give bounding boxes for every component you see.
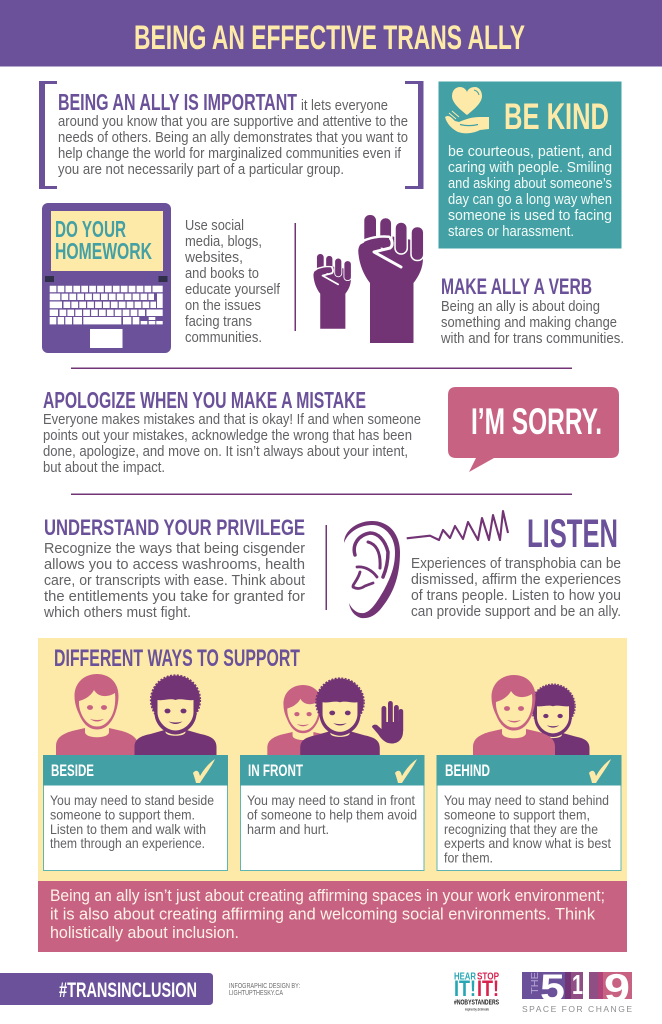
body text: Everyone makes mistakes and that is okay! If and when someone [43,412,421,428]
card heading: IN FRONT [248,762,303,780]
logo: hear it stop it [454,972,499,1012]
card heading: BEHIND [445,762,490,780]
card heading: BESIDE [51,762,94,780]
body text [58,98,408,178]
figures: behind [473,675,589,756]
figures: beside [56,674,216,755]
body text: Recognize the ways that being cisgender [44,541,305,557]
panel: do your homework laptop [42,203,171,353]
body text: care, or transcripts with ease. Think about [44,573,305,589]
body text: it lets everyone [301,98,388,114]
text: do your homework: facing trans [185,314,252,330]
panel: make ally a verb: MAKE ALLY A VERB [441,274,592,299]
laptop hinges [45,276,168,282]
text: do your homework: Use social [185,218,244,234]
logo: hear it stop it: inspired by @ctvinside [465,1006,489,1012]
card: behind [436,755,622,870]
body text: stares or harassment. [448,224,574,240]
body text: needs of others. Being an ally demonstrates that you want to [58,130,408,146]
logo: hear it stop it: IT! [477,976,499,1001]
laptop screen [51,211,163,271]
hashtag banner: #TRANSINCLUSION [59,979,197,1002]
card text [247,792,417,837]
body text: but about the impact. [43,460,165,476]
card text: Listen to them and walk with [50,821,206,837]
card: in front [240,755,424,870]
body text: which others must fight. [43,605,191,621]
icon: sound wave [407,511,508,540]
card: beside [43,755,228,870]
logo: the 519: THE [530,972,541,994]
logo: the 519: 5 [540,967,565,1010]
callout: think holistically [38,881,627,952]
logo: hear it stop it: IT! [454,976,476,1001]
body text: of trans people. Listen to how you [411,588,621,604]
body text: dismissed, affirm the experiences [411,572,621,588]
hashtag banner [0,973,213,1005]
body text: can provide support and be an ally. [411,604,621,620]
figures: in front [267,678,380,756]
body text: the entitlements you take for granted for [44,589,305,605]
body text [43,541,305,621]
logo: the 519 [522,967,632,1014]
body text: around you know that you are supportive and attentive to the [58,114,408,130]
card text: someone to support them, [444,806,590,822]
body text: Being an ally is about doing [441,299,600,315]
body text: points out your mistakes, acknowledge the wrong that has been [43,428,412,444]
design credit: LIGHTUPTHESKY.CA [229,990,283,997]
panel: make ally a verb [440,274,624,347]
panel: be kind [438,82,622,248]
body text: be courteous, patient, and [448,144,612,160]
body text [43,412,421,476]
logo: the 519: 1 [572,969,583,1000]
logo: hear it stop it: #NOBYSTANDERS [454,1000,499,1006]
body text: someone is used to facing [448,208,612,224]
design credit: INFOGRAPHIC DESIGN BY: [229,983,300,990]
card text: You may need to stand behind [444,792,609,808]
heading: DIFFERENT WAYS TO SUPPORT [54,645,300,672]
text: do your homework [184,218,281,346]
panel: being an ally is important [39,81,424,189]
text: do your homework: media, blogs, [185,234,262,250]
card text: recognizing that they are the [444,821,598,837]
body text: Experiences of transphobia can be [411,556,621,572]
card text: of someone to help them avoid [247,806,417,822]
panel: apologize [43,387,421,476]
panel: understand your privilege: UNDERSTAND YOUR PRIVILEGE [44,515,305,540]
icon: ear [344,521,400,618]
body text: done, apologize, and move on. It isn’t always about your intent, [43,444,408,460]
panel: listen [411,512,621,620]
icon: check mark [193,759,215,783]
body text: you are not necessarily part of a particular group. [58,162,344,178]
body text: something and making change [441,315,617,331]
body text: allows you to access washrooms, health [44,557,305,573]
left bracket [42,82,57,188]
callout: think holistically: it is also about creating affirming and welcoming social environments. Think [50,904,595,924]
body text: day can go a long way when [448,192,612,208]
card text: experts and know what is best [444,835,611,851]
speech bubble: I'm sorry [448,387,619,472]
icon: check mark [395,759,417,783]
body text: and asking about someone’s [448,176,612,192]
icon: heart in hand [445,87,489,133]
logo: the 519: 9 [604,967,630,1010]
card text: You may need to stand beside [50,792,214,808]
text: do your homework: websites, [184,250,243,266]
body text [448,144,612,240]
text: do your homework: educate yourself [185,282,281,298]
header banner [0,0,662,66]
design credit [229,983,300,997]
card text [444,792,611,866]
screen heading: HOMEWORK [55,238,152,264]
panel: apologize: APOLOGIZE WHEN YOU MAKE A MISTAKE [43,387,366,413]
screen heading: DO YOUR [55,216,126,242]
callout: think holistically: Being an ally isn’t just about creating affirming spaces in your work environment; [50,886,605,905]
trackpad [90,329,122,348]
heading: BE KIND [504,95,609,137]
heading: BEING AN ALLY IS IMPORTANT [58,89,297,115]
card text [50,792,214,851]
card text: for them. [444,850,493,866]
body text [411,556,621,620]
panel: different ways to support [38,638,627,881]
text: do your homework: on the issues [185,298,261,314]
text: do your homework: and books to [185,266,259,282]
laptop keyboard [50,286,163,324]
card text: them through an experience. [50,835,205,851]
card text: harm and hurt. [247,821,329,837]
icon: check mark [589,759,611,783]
body text: with and for trans communities. [440,331,624,347]
body text [440,299,624,347]
icon: raised hand [372,701,403,744]
screen heading [55,216,152,264]
icon: raised fists [313,215,424,343]
card text: someone to support them. [50,806,195,822]
body text: help change the world for marginalized communities even if [58,146,402,162]
logo: hear it stop it: STOP [477,972,499,982]
logo: the 519: SPACE FOR CHANGE [522,1004,632,1014]
text: do your homework: communities. [185,330,262,346]
body text: caring with people. Smiling [448,160,612,176]
panel: understand your privilege [43,515,305,621]
right bracket [405,82,420,188]
card text: You may need to stand in front [247,792,415,808]
logo: hear it stop it: HEAR [454,972,477,982]
callout: think holistically: holistically about inclusion. [50,923,239,942]
